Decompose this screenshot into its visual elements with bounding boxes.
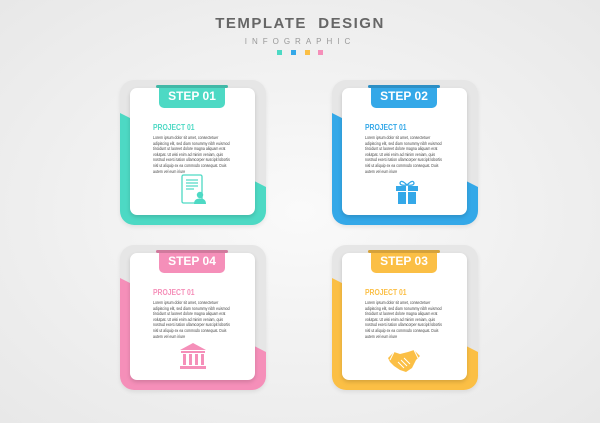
panel: step 01 — [120, 80, 266, 228]
tab: step 03: STEP 03 — [380, 254, 428, 268]
text block: Lorem ipsum dolor sit amet, consectetuer adipiscing elit, sed diam nonummy nibh euismod tincidunt ut laoreet dolore magna aliquam erat volutpat. Ut wisi enim ad minim veniam, quis nostrud exerci tation ullamcorper suscipit lobortis nisl ut aliquip ex ea commodo consequat. Duis autem vel eum iriure — [153, 300, 230, 339]
icon: gift — [396, 180, 418, 204]
text block: PROJECT 01 — [365, 288, 407, 297]
tab: step 01: STEP 01 — [168, 89, 216, 103]
tab: step 02 — [371, 85, 437, 108]
tab: step 02: STEP 02 — [380, 89, 428, 103]
panel: step 04 — [120, 245, 266, 392]
tab: step 04: STEP 04 — [168, 254, 216, 268]
text block: Lorem ipsum dolor sit amet, consectetuer adipiscing elit, sed diam nonummy nibh euismod tincidunt ut laoreet dolore magna aliquam erat volutpat. Ut wisi enim ad minim veniam, quis nostrud exerci tation ullamcorper suscipit lobortis nisl ut aliquip ex ea commodo consequat. Duis autem vel eum iriure — [365, 300, 442, 339]
text block: PROJECT 01 — [153, 123, 195, 132]
tab: step 03 — [371, 250, 437, 273]
panel: step 03 — [332, 245, 478, 392]
colour dots — [277, 50, 323, 55]
text block: Lorem ipsum dolor sit amet, consectetuer adipiscing elit, sed diam nonummy nibh euismod tincidunt ut laoreet dolore magna aliquam erat volutpat. Ut wisi enim ad minim veniam, quis nostrud exerci tation ullamcorper suscipit lobortis nisl ut aliquip ex ea commodo consequat. Duis autem vel eum iriure — [365, 135, 442, 174]
panel: step 02 — [332, 80, 478, 228]
tab: step 04 — [159, 250, 225, 273]
text block: PROJECT 01 — [153, 288, 195, 297]
icon: bank — [180, 343, 206, 369]
text block: PROJECT 01 — [365, 123, 407, 132]
icon: certificate — [181, 174, 206, 204]
text block: Lorem ipsum dolor sit amet, consectetuer adipiscing elit, sed diam nonummy nibh euismod tincidunt ut laoreet dolore magna aliquam erat volutpat. Ut wisi enim ad minim veniam, quis nostrud exerci tation ullamcorper suscipit lobortis nisl ut aliquip ex ea commodo consequat. Duis autem vel eum iriure — [153, 135, 230, 174]
title: TEMPLATE DESIGN — [215, 15, 385, 32]
tab: step 01 — [159, 85, 225, 108]
icon: handshake — [388, 350, 420, 372]
subtitle: INFOGRAPHIC — [245, 37, 355, 46]
